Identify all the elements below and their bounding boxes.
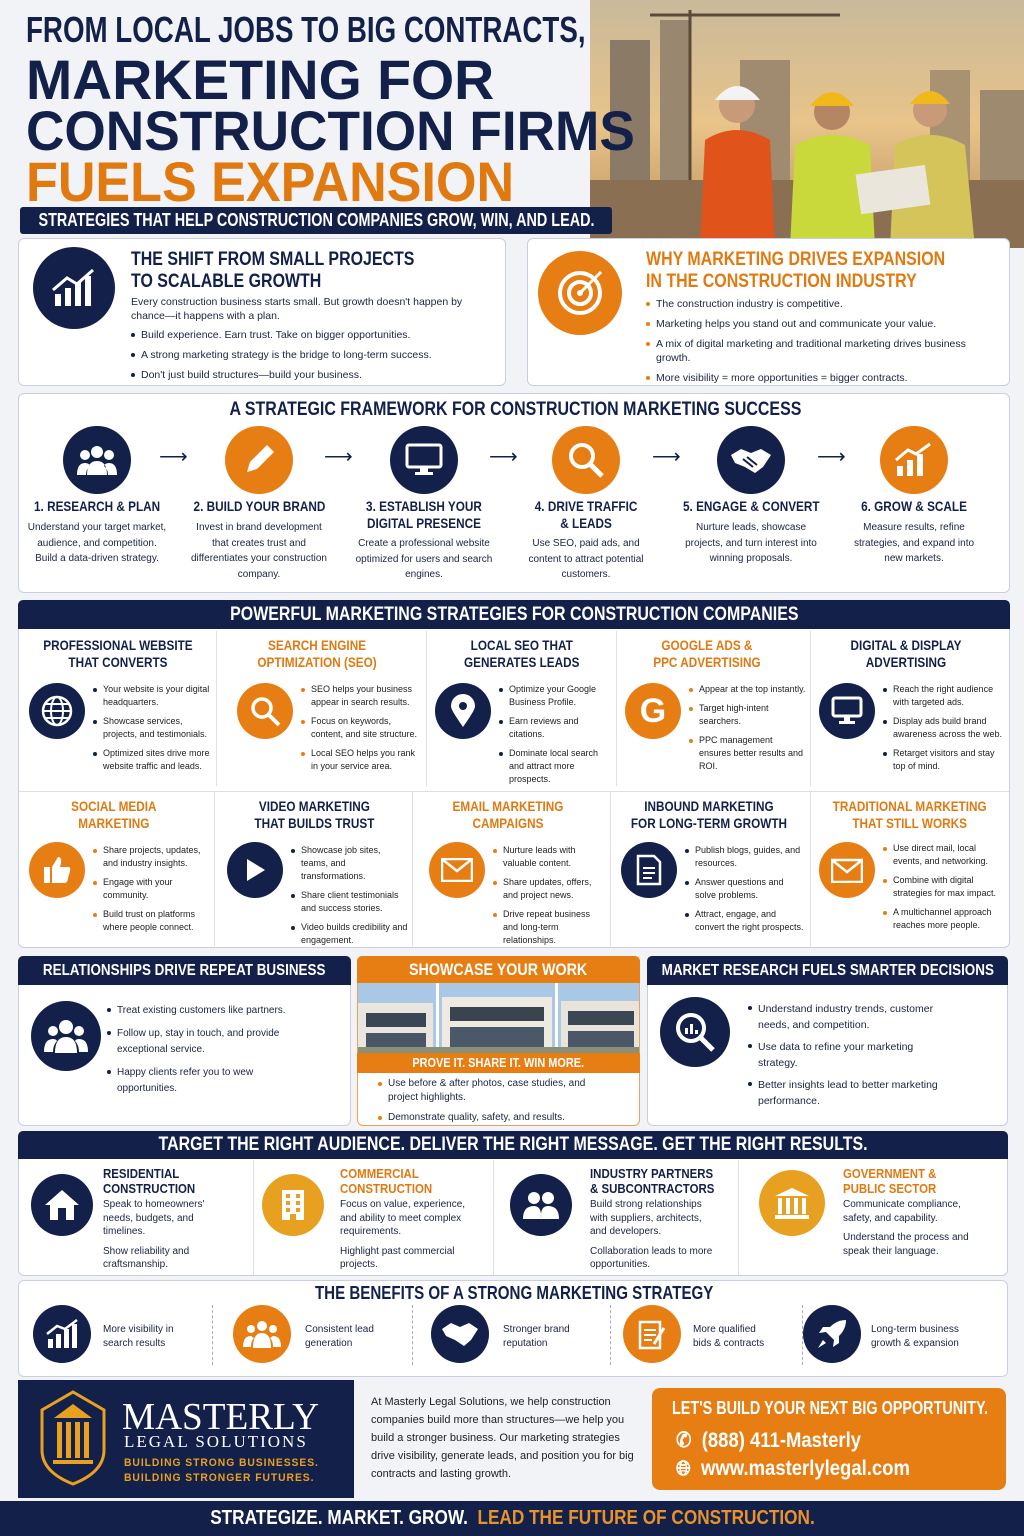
bullets: Marketing helps you stand out and communicate your value. bbox=[656, 318, 936, 330]
panel: strategic framework: Understand your target market, audience, and competition. Build a data-driven strategy. bbox=[28, 522, 166, 564]
strategy: google ads: Target high-intent searchers. bbox=[699, 703, 769, 726]
strategy: display: Reach the right audience with targeted ads. bbox=[893, 684, 993, 707]
strategy: traditional: A multichannel approach reaches more people. bbox=[893, 907, 992, 930]
benefit 3 bbox=[431, 1305, 611, 1365]
header photo: construction workers bbox=[590, 0, 1024, 248]
photo: buildings bbox=[358, 983, 639, 1053]
strategy: social media: MARKETING bbox=[78, 815, 150, 831]
title: FUELS EXPANSION bbox=[26, 150, 514, 213]
panel: strategic framework: Nurture leads, showcase projects, and turn interest into winning proposals. bbox=[685, 522, 817, 564]
strategy: local SEO: LOCAL SEO THAT bbox=[471, 637, 573, 653]
strategy: google ads: GOOGLE ADS & bbox=[661, 637, 753, 653]
strategy: display: DIGITAL & DISPLAY bbox=[851, 637, 961, 653]
strategy: social media: Build trust on platforms where people connect. bbox=[103, 909, 195, 932]
bottom banner bbox=[0, 1501, 1024, 1536]
strategy: traditional: Combine with digital strategies for max impact. bbox=[893, 875, 996, 898]
heading: IN THE CONSTRUCTION INDUSTRY bbox=[646, 271, 917, 292]
text: A strong marketing strategy is the bridge to long-term success. bbox=[141, 349, 432, 361]
bullets: The construction industry is competitive. bbox=[656, 298, 843, 310]
strategy: google ads bbox=[617, 631, 811, 786]
strategy: traditional: Use direct mail, local events, and networking. bbox=[893, 843, 988, 866]
footer logo block bbox=[18, 1380, 354, 1498]
strategy: email: Drive repeat business and long-term relationships. bbox=[503, 909, 590, 945]
benefit 4: bids & contracts bbox=[693, 1338, 764, 1349]
strategy: google ads: PPC ADVERTISING bbox=[653, 654, 761, 670]
panel: shift to scalable growth bbox=[18, 238, 506, 386]
strategy: email: EMAIL MARKETING bbox=[453, 798, 563, 814]
arrow: ⟶ bbox=[652, 446, 681, 468]
panel: relationships: RELATIONSHIPS DRIVE REPEAT BUSINESS bbox=[43, 962, 326, 979]
strategy: SEO: SEARCH ENGINE bbox=[268, 637, 366, 653]
strategy: inbound: Attract, engage, and convert the right prospects. bbox=[695, 909, 804, 932]
text: Don't just build structures—build your business. bbox=[141, 369, 362, 381]
panel: strategic framework: Use SEO, paid ads, and content to attract potential customers. bbox=[528, 538, 644, 580]
arrow: ⟶ bbox=[817, 446, 846, 468]
bullets: More visibility = more opportunities = bigger contracts. bbox=[656, 372, 908, 384]
audience: partners: Build strong relationships with suppliers, architects, and developers. bbox=[590, 1199, 702, 1237]
title: MARKETING FOR bbox=[26, 48, 494, 111]
strategy: inbound: INBOUND MARKETING bbox=[644, 798, 774, 814]
arrow: ⟶ bbox=[489, 446, 518, 468]
benefit 4 bbox=[623, 1305, 803, 1365]
audience: residential: CONSTRUCTION bbox=[103, 1181, 195, 1196]
CTA box bbox=[652, 1388, 1006, 1490]
icon: target bbox=[538, 251, 622, 335]
benefit 2 bbox=[233, 1305, 413, 1365]
strategy: google ads: G bbox=[640, 692, 666, 730]
strategy: website bbox=[19, 631, 217, 786]
panel: showcase your work: Use before & after photos, case studies, and project highlights. bbox=[388, 1078, 585, 1103]
strategy: local SEO: Earn reviews and citations. bbox=[509, 716, 579, 739]
strategy: display: Display ads build brand awareness across the web. bbox=[893, 716, 1002, 739]
footer logo block: BUILDING STRONGER FUTURES. bbox=[124, 1472, 314, 1484]
strategy: SEO: OPTIMIZATION (SEO) bbox=[257, 654, 377, 670]
strategy: social media: Share projects, updates, and industry insights. bbox=[103, 845, 201, 868]
audience: commercial bbox=[254, 1160, 494, 1275]
audience: partners: Collaboration leads to more opportunities. bbox=[590, 1246, 712, 1270]
panel: relationships bbox=[18, 956, 351, 1126]
strategy: video bbox=[215, 791, 413, 946]
panel: relationships: Treat existing customers like partners. bbox=[117, 1005, 286, 1016]
panel: market research: Understand industry trends, customer needs, and competition. bbox=[758, 1003, 933, 1031]
strategy: SEO: Local SEO helps you rank in your service area. bbox=[311, 748, 415, 771]
strategy: inbound bbox=[611, 791, 811, 946]
panel: market research bbox=[647, 956, 1008, 1126]
benefit 1: search results bbox=[103, 1338, 165, 1349]
audience: residential: Speak to homeowners' needs, budgets, and timelines. bbox=[103, 1199, 204, 1237]
strategy: email bbox=[413, 791, 611, 946]
strategy: display: Retarget visitors and stay top of mind. bbox=[893, 748, 995, 771]
benefit 2: Consistent lead bbox=[305, 1324, 374, 1335]
strategy: google ads: PPC management ensures better results and ROI. bbox=[699, 735, 803, 771]
panel: market research: Use data to refine your marketing strategy. bbox=[758, 1041, 913, 1069]
footer description: At Masterly Legal Solutions, we help construction companies build more than structures—we help you build a stronger business. Our marketing strategies drive visibility, generate leads, and position you for big contracts and lasting growth. bbox=[371, 1396, 634, 1480]
audience: partners: INDUSTRY PARTNERS bbox=[590, 1166, 713, 1181]
panel: showcase your work: Demonstrate quality, safety, and results. bbox=[388, 1112, 565, 1123]
subtitle bar bbox=[20, 207, 612, 234]
audience: government: Communicate compliance, safety, and capability. bbox=[843, 1199, 961, 1224]
panel: why marketing drives expansion bbox=[527, 238, 1010, 386]
panel: target the right audience bbox=[18, 1131, 1008, 1276]
benefit 2: generation bbox=[305, 1338, 352, 1349]
strategy: display: ADVERTISING bbox=[866, 654, 946, 670]
audience: commercial: Focus on value, experience, and ability to meet complex requirements. bbox=[340, 1199, 465, 1237]
benefit 5: Long-term business bbox=[871, 1324, 959, 1335]
audience: commercial: CONSTRUCTION bbox=[340, 1181, 432, 1196]
footer logo block: BUILDING STRONG BUSINESSES. bbox=[124, 1457, 319, 1469]
strategy: website: Showcase services, projects, and testimonials. bbox=[103, 716, 207, 739]
heading bbox=[646, 249, 945, 292]
heading: WHY MARKETING DRIVES EXPANSION bbox=[646, 249, 945, 270]
audience: residential: RESIDENTIAL bbox=[103, 1166, 179, 1181]
strategy: SEO bbox=[217, 631, 427, 786]
panel: relationships: Happy clients refer you to wew opportunities. bbox=[117, 1067, 253, 1094]
strategies header bbox=[18, 600, 1010, 629]
benefit 5: growth & expansion bbox=[871, 1338, 959, 1349]
title bbox=[26, 9, 635, 213]
audience: commercial: COMMERCIAL bbox=[340, 1166, 419, 1181]
panel: strategic framework: Invest in brand development that creates trust and differentiates your construction company. bbox=[191, 522, 327, 580]
icon: logo shield bbox=[40, 1390, 106, 1486]
panel: showcase your work bbox=[357, 956, 640, 1126]
strategy: website: PROFESSIONAL WEBSITE bbox=[43, 637, 193, 653]
icon: magnifier chart bbox=[660, 997, 730, 1067]
strategy: local SEO: GENERATES LEADS bbox=[464, 654, 580, 670]
icon: people bbox=[31, 1001, 101, 1071]
panel: strategic framework: 2. BUILD YOUR BRAND bbox=[193, 498, 325, 514]
audience: government: GOVERNMENT & bbox=[843, 1166, 936, 1181]
panel: market research: Better insights lead to better marketing performance. bbox=[758, 1079, 938, 1107]
panel: showcase your work: PROVE IT. SHARE IT. WIN MORE. bbox=[413, 1055, 584, 1070]
heading bbox=[131, 249, 414, 292]
subtitle bar: STRATEGIES THAT HELP CONSTRUCTION COMPANIES GROW, WIN, AND LEAD. bbox=[38, 210, 594, 230]
panel: strategic framework: 6. GROW & SCALE bbox=[861, 498, 967, 514]
step 3 bbox=[356, 426, 492, 580]
audience: government bbox=[759, 1166, 969, 1256]
audience: commercial: Highlight past commercial projects. bbox=[340, 1246, 454, 1270]
strategy: SEO: Focus on keywords, content, and site structure. bbox=[311, 716, 417, 739]
strategy: video: Showcase job sites, teams, and transformations. bbox=[301, 845, 381, 881]
title: CONSTRUCTION FIRMS bbox=[26, 99, 635, 162]
strategy: display bbox=[819, 637, 1002, 771]
audience: partners bbox=[494, 1160, 739, 1275]
strategy: video: THAT BUILDS TRUST bbox=[254, 815, 374, 831]
strategy: email: CAMPAIGNS bbox=[472, 815, 544, 831]
framework title: A STRATEGIC FRAMEWORK FOR CONSTRUCTION MARKETING SUCCESS bbox=[229, 399, 801, 420]
audience: partners: & SUBCONTRACTORS bbox=[590, 1181, 714, 1196]
strategy: website: Optimized sites drive more website traffic and leads. bbox=[103, 748, 210, 771]
bullets: A mix of digital marketing and traditional marketing drives business growth. bbox=[656, 338, 966, 364]
strategy: email: Nurture leads with valuable content. bbox=[503, 845, 576, 868]
strategy: google ads: Appear at the top instantly. bbox=[699, 684, 805, 694]
benefit 1 bbox=[33, 1305, 213, 1365]
strategy: inbound: FOR LONG-TERM GROWTH bbox=[631, 815, 787, 831]
panel: target the right audience: TARGET THE RIGHT AUDIENCE. DELIVER THE RIGHT MESSAGE. GET THE RIGHT RESULTS. bbox=[158, 1134, 868, 1155]
step 4 bbox=[528, 426, 644, 580]
step 2 bbox=[191, 426, 327, 580]
heading: TO SCALABLE GROWTH bbox=[131, 271, 321, 292]
benefit 1: More visibility in bbox=[103, 1324, 174, 1335]
strategy: inbound: Publish blogs, guides, and resources. bbox=[695, 845, 800, 868]
footer logo block: LEGAL SOLUTIONS bbox=[124, 1432, 308, 1451]
panel: strategic framework: & LEADS bbox=[560, 515, 612, 531]
strategy: local SEO: Optimize your Google Business Profile. bbox=[509, 684, 596, 707]
strategy: traditional bbox=[811, 791, 1009, 946]
audience: government: Understand the process and speak their language. bbox=[843, 1232, 969, 1256]
CTA box: 🌐︎ www.masterlylegal.com bbox=[676, 1457, 910, 1480]
text: Build experience. Earn trust. Take on bigger opportunities. bbox=[141, 329, 410, 341]
panel: strategic framework: 1. RESEARCH & PLAN bbox=[34, 498, 160, 514]
panel: strategic framework: 3. ESTABLISH YOUR bbox=[366, 498, 482, 514]
panel: relationships: Follow up, stay in touch, and provide exceptional service. bbox=[117, 1028, 279, 1055]
strategy: website: THAT CONVERTS bbox=[68, 654, 168, 670]
step 5 bbox=[683, 426, 820, 564]
panel: benefits: THE BENEFITS OF A STRONG MARKETING STRATEGY bbox=[315, 1283, 713, 1303]
panel: market research: MARKET RESEARCH FUELS SMARTER DECISIONS bbox=[661, 962, 994, 979]
panel: strategic framework: DIGITAL PRESENCE bbox=[367, 515, 481, 531]
strategy: email: Share updates, offers, and project news. bbox=[503, 877, 591, 900]
step 1 bbox=[28, 426, 166, 564]
benefit 3: reputation bbox=[503, 1338, 547, 1349]
bottom banner: STRATEGIZE. MARKET. GROW. LEAD THE FUTURE OF CONSTRUCTION. bbox=[210, 1507, 814, 1529]
text bbox=[131, 296, 462, 381]
strategy: local SEO: Dominate local search and attract more prospects. bbox=[509, 748, 598, 784]
strategy: video: Video builds credibility and engagement. bbox=[301, 922, 407, 945]
strategies header: POWERFUL MARKETING STRATEGIES FOR CONSTRUCTION COMPANIES bbox=[230, 604, 798, 625]
audience: residential: Show reliability and craftsmanship. bbox=[103, 1246, 189, 1270]
CTA box: LET'S BUILD YOUR NEXT BIG OPPORTUNITY. bbox=[672, 1398, 988, 1418]
panel: strategic framework: 4. DRIVE TRAFFIC bbox=[535, 498, 637, 514]
text: Every construction business starts small. But growth doesn't happen by chance—it happens with a plan. bbox=[131, 296, 462, 322]
strategy: inbound: Answer questions and solve problems. bbox=[695, 877, 784, 900]
strategy: traditional: THAT STILL WORKS bbox=[853, 815, 967, 831]
audience: government: PUBLIC SECTOR bbox=[843, 1181, 936, 1196]
footer logo block: MASTERLY bbox=[122, 1396, 319, 1438]
panel: strategic framework: 5. ENGAGE & CONVERT bbox=[683, 498, 819, 514]
CTA box: ✆ (888) 411-Masterly bbox=[676, 1429, 861, 1452]
benefit 4: More qualified bbox=[693, 1324, 756, 1335]
panel: strategic framework: Create a professional website optimized for users and search engines. bbox=[356, 538, 492, 580]
strategy: social media bbox=[19, 791, 215, 946]
arrow: ⟶ bbox=[324, 446, 353, 468]
benefit 3: Stronger brand bbox=[503, 1324, 570, 1335]
strategy: website: Your website is your digital headquarters. bbox=[103, 684, 209, 707]
panel: showcase your work: SHOWCASE YOUR WORK bbox=[409, 960, 588, 979]
panel: powerful marketing strategies bbox=[18, 600, 1010, 948]
strategy: SEO: SEO helps your business appear in search results. bbox=[311, 684, 412, 707]
panel: strategic framework bbox=[18, 393, 1010, 593]
strategy: traditional: TRADITIONAL MARKETING bbox=[833, 798, 987, 814]
heading: THE SHIFT FROM SMALL PROJECTS bbox=[131, 249, 414, 270]
benefit 5 bbox=[803, 1305, 959, 1363]
panel: strategic framework: Measure results, refine strategies, and expand into new markets. bbox=[854, 522, 974, 564]
step 6 bbox=[854, 426, 974, 564]
icon: growth chart bbox=[33, 247, 115, 329]
arrow: ⟶ bbox=[159, 446, 188, 468]
strategy: social media: SOCIAL MEDIA bbox=[71, 798, 157, 814]
bullets bbox=[646, 298, 966, 384]
panel: benefits bbox=[18, 1280, 1008, 1377]
strategy: local SEO bbox=[427, 631, 617, 786]
audience: residential bbox=[19, 1160, 254, 1275]
title: FROM LOCAL JOBS TO BIG CONTRACTS, bbox=[26, 9, 586, 50]
strategy: social media: Engage with your community. bbox=[103, 877, 173, 900]
strategy: video: Share client testimonials and success stories. bbox=[301, 890, 399, 913]
strategy: video: VIDEO MARKETING bbox=[258, 798, 370, 814]
